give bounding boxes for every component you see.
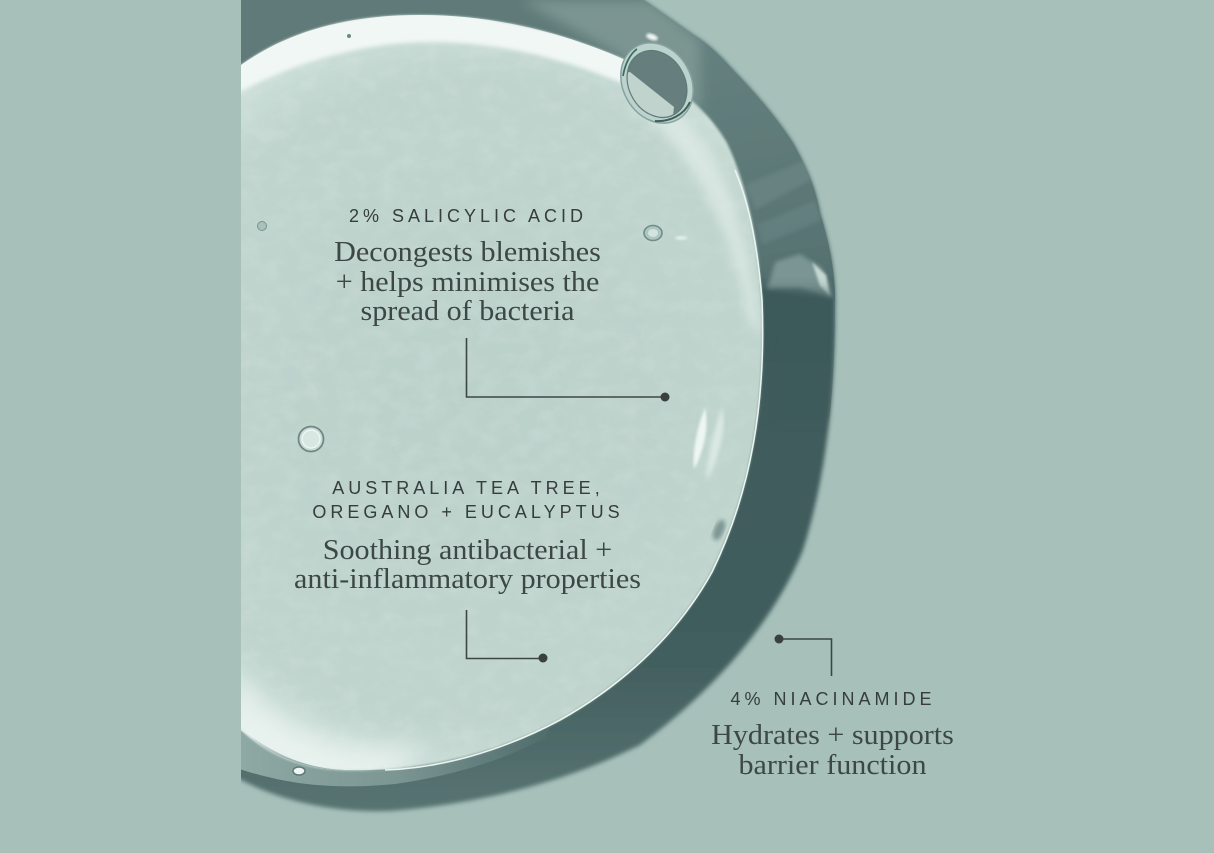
callout line: tea tree bbox=[466, 610, 548, 662]
text block: salicylic acid bbox=[334, 206, 601, 327]
droplet clear inner disc bbox=[220, 0, 771, 800]
label: tea tree, oregano, eucalyptus bbox=[312, 478, 624, 522]
description: niacinamide bbox=[711, 720, 954, 780]
description: tea tree blend: Soothing antibacterial + bbox=[323, 535, 612, 566]
label: 4% niacinamide: 4% NIACINAMIDE bbox=[730, 689, 936, 709]
description: salicylic acid: Decongests blemishes bbox=[334, 237, 601, 268]
illustration: serum droplet with callout lines bbox=[241, 0, 838, 814]
text block: tea tree blend bbox=[294, 478, 641, 594]
text block: niacinamide bbox=[711, 689, 954, 780]
label: 2% salicylic acid: 2% SALICYLIC ACID bbox=[349, 206, 587, 226]
callout line: niacinamide bbox=[774, 634, 832, 676]
large air bubble bbox=[620, 32, 694, 124]
description: salicylic acid: + helps minimises the bbox=[336, 266, 599, 298]
description: salicylic acid: spread of bacteria bbox=[361, 296, 574, 327]
callout line: salicylic acid bbox=[466, 338, 670, 402]
description: salicylic acid bbox=[334, 237, 601, 327]
reflection highlights on disc bbox=[694, 407, 728, 542]
description: tea tree blend bbox=[294, 535, 641, 594]
description: tea tree blend: anti-inflammatory properties bbox=[294, 564, 641, 594]
description: niacinamide: barrier function bbox=[738, 750, 927, 780]
small air bubbles bbox=[258, 34, 687, 775]
droplet outer dark rim bbox=[220, 0, 840, 811]
description: niacinamide: Hydrates + supports bbox=[711, 720, 954, 751]
label: tea tree, oregano, eucalyptus: OREGANO + EUCALYPTUS bbox=[312, 502, 624, 522]
label: tea tree, oregano, eucalyptus: AUSTRALIA TEA TREE, bbox=[332, 478, 604, 498]
